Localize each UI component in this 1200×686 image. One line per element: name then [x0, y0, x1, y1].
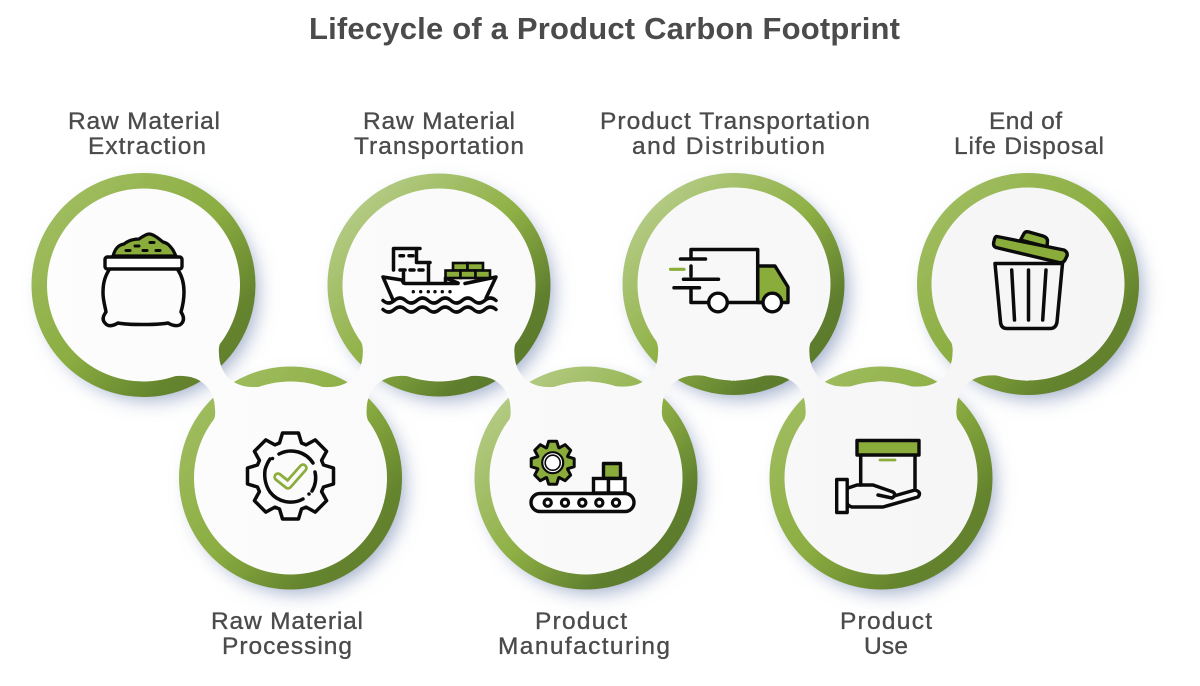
label: product use — [840, 608, 932, 660]
label: product transportation and distribution: Product Transportation — [600, 108, 870, 135]
label: product transportation and distribution: and Distribution — [632, 133, 825, 160]
drop shadows — [44, 186, 1141, 592]
icon: gear and conveyor belt — [531, 441, 634, 512]
green rings — [32, 173, 1139, 590]
label: product manufacturing: Product — [535, 608, 627, 635]
label: product manufacturing: Manufacturing — [498, 633, 670, 660]
label: product transportation and distribution — [600, 108, 870, 160]
connected white discs — [47, 188, 1124, 574]
label: product use: Product — [840, 608, 932, 635]
icon: sack of raw material — [103, 234, 184, 326]
title: Lifecycle of a Product Carbon Footprint — [309, 11, 900, 46]
label: raw material extraction: Extraction — [88, 133, 206, 160]
label: end of life disposal: End of — [989, 108, 1062, 135]
label: raw material processing: Raw Material — [211, 608, 363, 635]
label: raw material extraction — [68, 108, 220, 160]
label: raw material transportation: Transportation — [354, 133, 524, 160]
label: raw material transportation — [354, 108, 524, 160]
label: raw material processing: Processing — [222, 633, 352, 660]
icon: ship with containers — [383, 248, 496, 312]
label: raw material transportation: Raw Material — [363, 108, 515, 135]
label: raw material extraction: Raw Material — [68, 108, 220, 135]
icon: delivery truck — [670, 250, 788, 312]
label: end of life disposal — [954, 108, 1104, 160]
icon: trash bin — [994, 232, 1067, 328]
label: product use: Use — [864, 633, 908, 660]
icon: gear with check mark — [248, 433, 334, 519]
label: raw material processing — [211, 608, 363, 660]
label: end of life disposal: Life Disposal — [954, 133, 1104, 160]
label: product manufacturing — [498, 608, 670, 660]
icon: product in hand — [837, 440, 919, 512]
